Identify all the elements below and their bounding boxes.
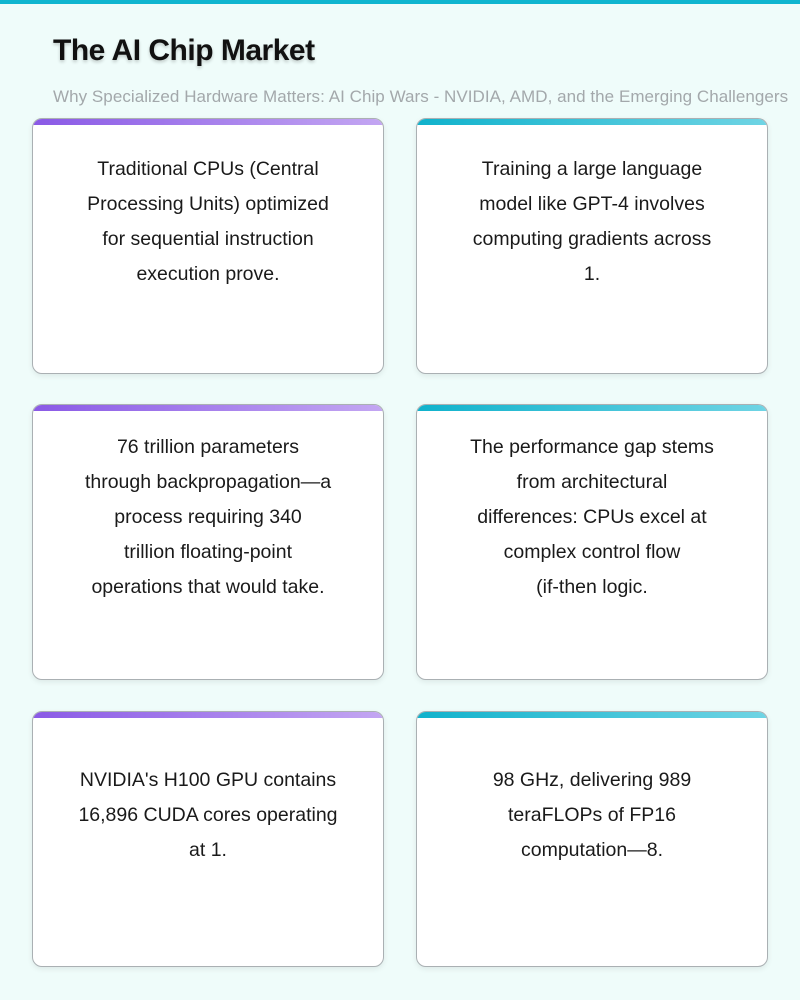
card 4: The performance gap stems — [470, 436, 714, 458]
card 5: at 1. — [189, 839, 227, 861]
card 2: 1. — [584, 263, 600, 285]
card 2 — [416, 118, 768, 374]
card 1: Traditional CPUs (Central — [97, 158, 319, 180]
card 1: Processing Units) optimized — [87, 193, 329, 215]
card 2: Training a large language — [482, 158, 702, 180]
card 4: (if-then logic. — [536, 576, 648, 598]
card 5: 16,896 CUDA cores operating — [78, 804, 338, 826]
card 4 — [416, 404, 768, 680]
card 4: differences: CPUs excel at — [477, 506, 707, 528]
card 6: computation—8. — [521, 839, 663, 861]
card 3 — [32, 404, 384, 680]
card 3: operations that would take. — [91, 576, 325, 598]
subtitle: Why Specialized Hardware Matters: AI Chip Wars - NVIDIA, AMD, and the Emerging Challengers — [53, 87, 788, 106]
card 1: execution prove. — [136, 263, 280, 285]
card 2: computing gradients across — [473, 228, 711, 250]
card 5 — [32, 711, 384, 967]
card 4: from architectural — [517, 471, 667, 493]
card 2: model like GPT-4 involves — [479, 193, 705, 215]
top accent bar — [0, 0, 800, 4]
card 6: 98 GHz, delivering 989 — [493, 769, 691, 791]
card 4: complex control flow — [504, 541, 680, 563]
card 3: through backpropagation—a — [85, 471, 331, 493]
card 3: process requiring 340 — [114, 506, 302, 528]
card 3: trillion floating-point — [124, 541, 292, 563]
card 5: NVIDIA's H100 GPU contains — [80, 769, 336, 791]
card 6: teraFLOPs of FP16 — [508, 804, 676, 826]
card 3: 76 trillion parameters — [117, 436, 299, 458]
card 6 — [416, 711, 768, 967]
title: The AI Chip Market — [53, 34, 315, 67]
card 1 — [32, 118, 384, 374]
card 1: for sequential instruction — [102, 228, 314, 250]
